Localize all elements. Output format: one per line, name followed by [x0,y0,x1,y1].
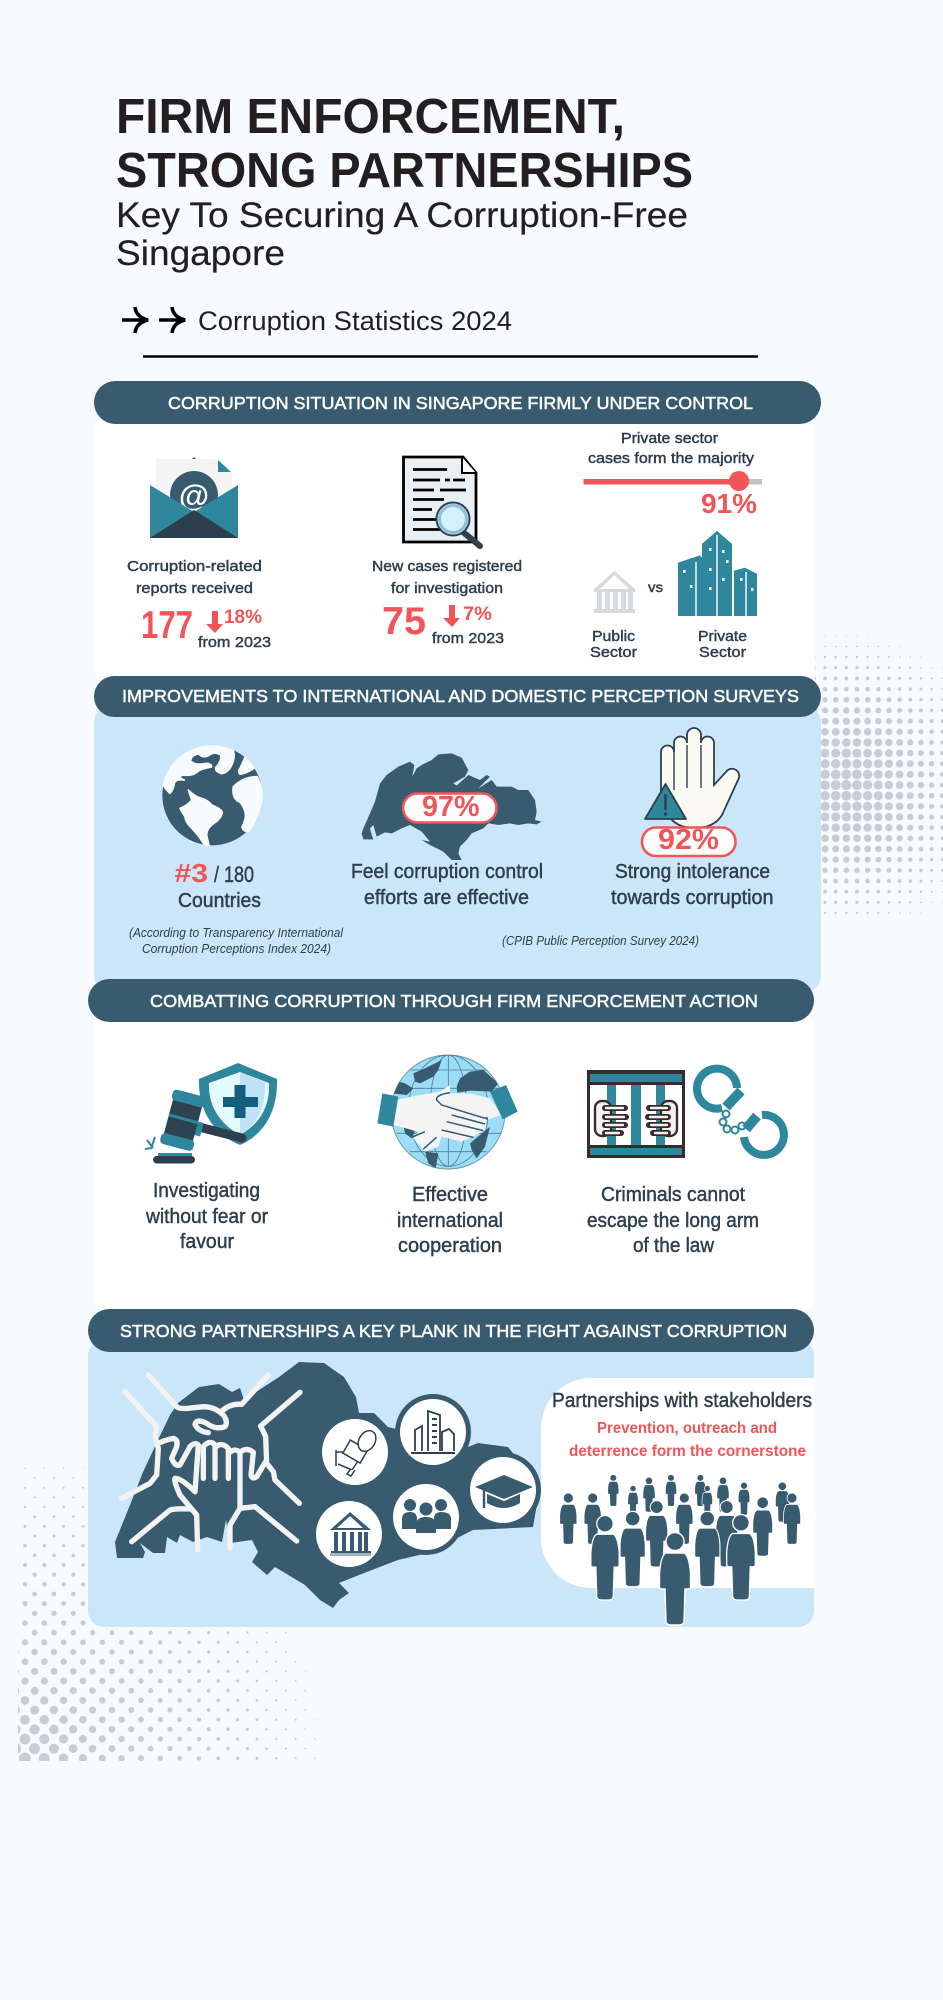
halftone dots: right [815,622,943,914]
panel background [88,1340,814,1627]
statistics heading: Corruption Statistics 2024 [198,306,512,336]
stat: 75 cases: 75 [382,600,426,643]
subtitle: Singapore [116,234,285,273]
header: corruption situation: CORRUPTION SITUATION IN SINGAPORE FIRMLY UNDER CONTROL [168,393,753,413]
text: international cooperation: cooperation [398,1235,502,1257]
text: criminals cannot escape: of the law [633,1235,715,1257]
icon: private sector buildings [678,530,757,616]
header: perception surveys [94,676,821,717]
text: public and private sector labels: Sector [699,644,746,661]
icon: stop hand with warning [645,728,739,828]
stat: 177 reports: from 2023 [198,634,271,651]
stat: 177 reports: 177 [141,604,193,647]
callout: partnerships with stakeholders: Prevention, outreach and [597,1420,777,1437]
title [116,90,693,198]
icon: globe with handshake [377,1055,518,1169]
icon: community group [388,1479,464,1555]
text: vs: vs [648,579,663,595]
icon: gavel and shield [145,1063,277,1164]
text: criminals cannot escape: escape the long arm [587,1210,759,1232]
text: investigating: without fear or [145,1206,268,1228]
icon: globe [162,745,262,845]
panel: strong partnerships [88,1340,814,1627]
illustration: crowd of people [560,1475,801,1625]
slider chart: 91% [584,471,762,519]
header: firm enforcement [88,979,814,1022]
badge: 92% [642,824,736,856]
text: new cases [372,558,522,597]
text: investigating: favour [180,1231,234,1253]
text: strong intolerance: towards corruption [611,887,774,909]
stat: 177 reports: 18% [224,607,262,628]
text: investigating: Investigating [153,1180,260,1202]
icon: media microphone [317,1414,393,1490]
text: source TI index: Corruption Perceptions Index 2024) [142,942,331,956]
header: perception surveys: IMPROVEMENTS TO INTERNATIONAL AND DOMESTIC PERCEPTION SURVEYS [122,686,799,706]
icon: document with magnifier [404,457,480,546]
text: public and private sector labels: Public [592,628,636,645]
title: STRONG PARTNERSHIPS [116,144,693,198]
panel background [94,706,821,992]
text: investigating [145,1180,268,1253]
text: international cooperation: Effective [412,1184,488,1206]
icon: graduation cap [465,1452,541,1528]
illustration: joined hands [122,1375,300,1550]
icon: handcuffs [697,1069,784,1155]
icon: business buildings [395,1394,471,1470]
text: source TI index: (According to Transparency International [129,926,344,940]
map: Singapore with 97% [362,753,542,860]
stat: rank 3 of 180: #3 [174,858,208,888]
text: criminals cannot escape: Criminals cannot [601,1184,745,1206]
arrows [122,307,185,333]
text: criminals cannot escape [587,1184,759,1257]
badge: 92%: 92% [658,824,719,856]
stat: rank 3 of 180: / 180 [214,862,254,887]
text: reports received [127,558,262,597]
icon: email: @ [179,478,209,513]
callout: partnerships with stakeholders: Partnerships with stakeholders [552,1390,812,1412]
panel background [94,1012,814,1312]
header: firm enforcement: COMBATTING CORRUPTION THROUGH FIRM ENFORCEMENT ACTION [150,991,758,1011]
stat: 177 reports [141,604,271,651]
map: Singapore with 97%: 97% [422,791,480,823]
text: strong intolerance [611,861,774,909]
header: strong partnerships [88,1309,814,1352]
icon: jail bars [587,1070,685,1158]
panel: perception surveys [94,706,821,992]
stat: rank 3 of 180 [174,858,261,912]
text: source CPIB survey: (CPIB Public Perception Survey 2024) [502,934,699,948]
header: corruption situation [94,381,821,424]
text: public and private sector labels [590,628,747,661]
stat: 75 cases: 7% [463,604,492,625]
title: FIRM ENFORCEMENT, [116,90,625,144]
text: public and private sector labels: Sector [590,644,637,661]
text: new cases: for investigation [391,580,503,597]
text: feel corruption control: Feel corruption control [351,861,543,883]
text: feel corruption control [351,861,543,909]
stat: 75 cases [382,600,504,647]
text: strong intolerance: Strong intolerance [615,861,770,883]
text: reports received: reports received [136,580,253,597]
text: private sector majority: cases form the majority [588,451,755,467]
icon: email [150,457,238,538]
panel background [94,410,814,685]
subtitle: Key To Securing A Corruption-Free [116,196,688,235]
map: Singapore large [115,1362,540,1608]
icon: government building [311,1496,387,1572]
text: source TI index [129,926,344,956]
stat: rank 3 of 180: Countries [178,890,261,912]
text: new cases: New cases registered [372,558,522,575]
text: reports received: Corruption-related [127,558,262,575]
subtitle [116,196,688,273]
stat: 75 cases: from 2023 [432,630,504,647]
text: international cooperation [397,1184,503,1257]
text: private sector majority: Private sector [621,431,718,447]
icon: public sector bank [594,571,635,613]
panel: corruption situation [94,410,814,685]
halftone dots: bottom left [18,1450,328,1761]
text: public and private sector labels: Private [698,628,747,645]
panel: firm enforcement [144,1054,788,1256]
header: strong partnerships: STRONG PARTNERSHIPS A KEY PLANK IN THE FIGHT AGAINST CORRUPTION [120,1321,787,1341]
text: feel corruption control: efforts are effective [364,887,529,909]
slider chart: 91%: 91% [701,488,757,519]
text: international cooperation: international [397,1210,503,1232]
callout: partnerships with stakeholders [541,1378,814,1588]
callout: partnerships with stakeholders: deterrence form the cornerstone [569,1443,806,1460]
text: private sector majority [588,431,755,467]
